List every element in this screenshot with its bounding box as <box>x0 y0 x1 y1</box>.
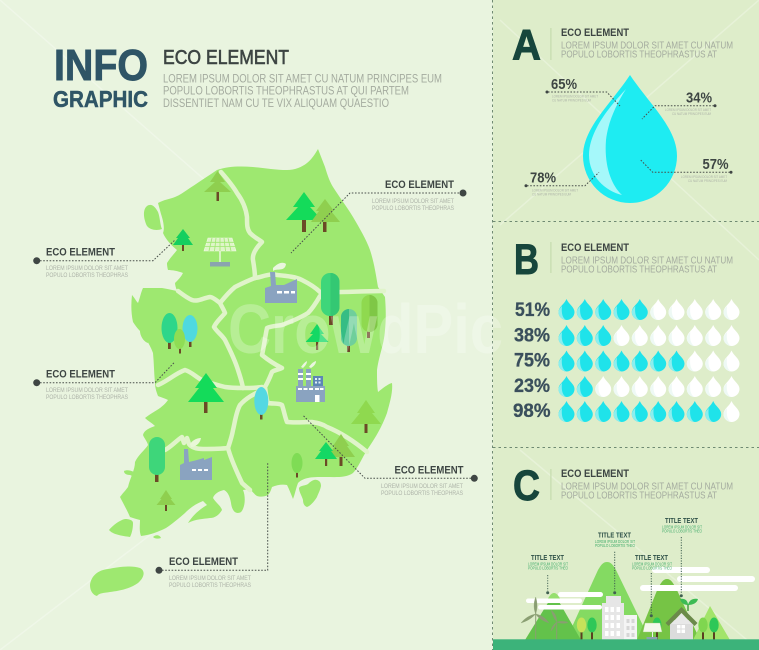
heading B <box>514 236 733 284</box>
heading C: C <box>513 462 540 510</box>
rivers <box>158 172 384 490</box>
big water drop <box>583 75 677 203</box>
heading: eco element: ECO ELEMENT <box>163 47 289 69</box>
panel: section C <box>493 462 759 650</box>
stat 78%: CU NATUM PRINCIPES EUM <box>532 192 571 196</box>
label 3: TITLE TEXT <box>635 553 668 562</box>
stat 34%: 34% <box>686 90 712 106</box>
callout: lower right: LOREM IPSUM DOLOR SIT AMET <box>381 483 463 490</box>
intro text: DISSENTIET NAM CU TE VIX ALIQUAM QUAESTIO <box>163 96 389 110</box>
trees right <box>698 618 719 640</box>
stat 34% <box>642 90 716 119</box>
callout: bottom: ECO ELEMENT <box>169 556 238 568</box>
mountains <box>525 562 730 640</box>
island: northwest <box>144 205 162 230</box>
map of Korea <box>90 149 392 596</box>
mainland <box>120 149 392 536</box>
stat 78%: 78% <box>530 170 556 186</box>
label 2: TITLE TEXT <box>598 530 631 540</box>
callout: middle left <box>33 362 175 401</box>
heading B: POPULO LOBORTIS THEOPHRASTUS AT <box>561 264 717 276</box>
title: GRAPHIC: GRAPHIC <box>53 86 148 112</box>
clouds <box>526 567 755 610</box>
row 98% <box>513 400 740 422</box>
stat 34%: LOREM IPSUM DOLOR SIT AMET <box>665 108 712 112</box>
callout: bottom: POPULO LOBORTIS THEOPHRAS <box>169 582 251 589</box>
stat 78% <box>524 170 599 196</box>
intro text <box>163 72 442 110</box>
icon: factory southwest <box>180 438 212 480</box>
stat 65% <box>546 77 620 106</box>
callout: lower right: POPULO LOBORTIS THEOPHRAS <box>381 490 463 497</box>
intro text: POPULO LOBORTIS THEOPHRASTUS AT QUI PARTEM <box>163 84 409 98</box>
stat 65%: LOREM IPSUM DOLOR SIT AMET <box>552 94 599 98</box>
callout: top right: ECO ELEMENT <box>385 179 454 191</box>
heading A: A <box>512 22 541 70</box>
callout: top right: LOREM IPSUM DOLOR SIT AMET <box>372 198 454 205</box>
callout: upper left: ECO ELEMENT <box>46 247 115 259</box>
callout: middle left: ECO ELEMENT <box>46 369 115 381</box>
stat 65%: 65% <box>551 77 577 93</box>
callout: upper left <box>33 240 175 279</box>
row 23% <box>514 375 740 397</box>
solar panel <box>643 618 662 640</box>
ground band <box>493 639 759 650</box>
callout: top right <box>291 179 466 253</box>
stat 34%: CU NATUM PRINCIPES EUM <box>672 112 711 116</box>
icon: pine olive top <box>204 171 231 201</box>
icon: pine olive east <box>351 400 381 433</box>
heading C <box>513 462 733 510</box>
icon: tall tree center <box>321 273 340 325</box>
label 1: LOREM IPSUM DOLOR SIT <box>528 562 568 566</box>
stat 57%: 57% <box>702 157 729 173</box>
label 4: POPULO LOBORTIS THEO <box>662 528 702 534</box>
icon: solar panel <box>204 238 236 266</box>
label 4: LOREM IPSUM DOLOR SIT <box>662 524 702 530</box>
row 98%: 98% <box>513 400 550 422</box>
house <box>666 607 698 640</box>
island: west coast <box>140 328 148 343</box>
label 2 <box>595 530 635 594</box>
watermark: CrowdPic <box>228 290 503 368</box>
heading A: ECO ELEMENT <box>561 27 629 39</box>
sprout <box>680 599 698 611</box>
label 4: TITLE TEXT <box>665 516 698 525</box>
island: southwest <box>109 519 133 537</box>
icon: factory north <box>265 263 297 303</box>
row 75%: 75% <box>514 350 550 372</box>
icon: pine olive <box>311 199 340 232</box>
label 2: POPULO LOBORTIS THEO <box>595 543 635 548</box>
stat 65%: CU NATUM PRINCIPES EUM <box>552 98 591 102</box>
callout: upper left: LOREM IPSUM DOLOR SIT AMET <box>46 265 128 272</box>
heading C: POPULO LOBORTIS THEOPHRASTUS AT <box>561 490 717 502</box>
icon: factory with chimneys <box>296 361 325 402</box>
row 38%: 38% <box>514 324 550 346</box>
trees left <box>577 618 597 640</box>
row 51% <box>515 299 740 321</box>
callout: lower right: ECO ELEMENT <box>394 464 464 476</box>
label 2: LOREM IPSUM DOLOR SIT <box>595 539 635 544</box>
label 3: POPULO LOBORTIS THEO <box>632 566 672 570</box>
row 75% <box>514 350 740 372</box>
island: jeju <box>90 566 144 596</box>
city building <box>602 596 637 640</box>
label 3: LOREM IPSUM DOLOR SIT <box>632 562 672 566</box>
stat 78%: LOREM IPSUM DOLOR SIT AMET <box>532 188 579 192</box>
icon: tall tree southwest <box>149 437 165 482</box>
title: INFO: INFO <box>54 41 148 90</box>
island: southern <box>299 480 321 507</box>
icon: tree teal east <box>341 309 357 352</box>
icon: tree olive east <box>362 295 378 338</box>
icon: pine small center <box>306 324 328 350</box>
stat 57% <box>640 157 732 183</box>
callout: top right: POPULO LOBORTIS THEOPHRAS <box>372 205 454 212</box>
icon: pine olive south <box>327 434 355 466</box>
heading A <box>512 22 733 70</box>
eco landscape illustration <box>493 516 759 650</box>
row 51%: 51% <box>515 299 550 321</box>
heading B: ECO ELEMENT <box>561 242 629 254</box>
panel: section B <box>513 236 740 422</box>
icon: pine green south <box>315 442 337 466</box>
icon: trees west <box>162 313 198 354</box>
island: southwest islet <box>124 470 140 478</box>
intro text: LOREM IPSUM DOLOR SIT AMET CU NATUM PRINCIPES EUM <box>163 72 442 86</box>
icon: pine green large <box>286 192 322 232</box>
heading C: ECO ELEMENT <box>561 468 629 480</box>
icon: pine small <box>173 229 193 251</box>
row 23%: 23% <box>514 375 550 397</box>
stat 57%: CU NATUM PRINCIPES EUM <box>688 179 727 183</box>
heading B: B <box>514 236 539 284</box>
panel: right column background <box>493 0 759 650</box>
callout: middle left: LOREM IPSUM DOLOR SIT AMET <box>46 387 128 394</box>
title block <box>53 41 442 112</box>
row 38% <box>514 324 740 346</box>
label 1: TITLE TEXT <box>531 553 564 562</box>
callout: middle left: POPULO LOBORTIS THEOPHRAS <box>46 394 128 401</box>
label 1: POPULO LOBORTIS THEO <box>528 566 568 570</box>
heading A: POPULO LOBORTIS THEOPHRASTUS AT <box>561 50 717 60</box>
icon: cyan tree center <box>254 387 268 420</box>
wind turbines <box>521 597 568 640</box>
callout: bottom <box>156 463 268 589</box>
icon: pine large west <box>188 373 224 413</box>
label 4 <box>662 516 702 597</box>
label 1 <box>528 553 568 594</box>
label 3 <box>632 553 672 617</box>
callout: lower right <box>303 415 478 497</box>
callout: bottom: LOREM IPSUM DOLOR SIT AMET <box>169 575 251 582</box>
callout: upper left: POPULO LOBORTIS THEOPHRAS <box>46 272 128 279</box>
panel: section A <box>512 22 733 203</box>
icon: small tree south <box>292 453 302 478</box>
icon: pine small southwest <box>156 490 176 511</box>
stat 57%: LOREM IPSUM DOLOR SIT AMET <box>681 175 728 179</box>
